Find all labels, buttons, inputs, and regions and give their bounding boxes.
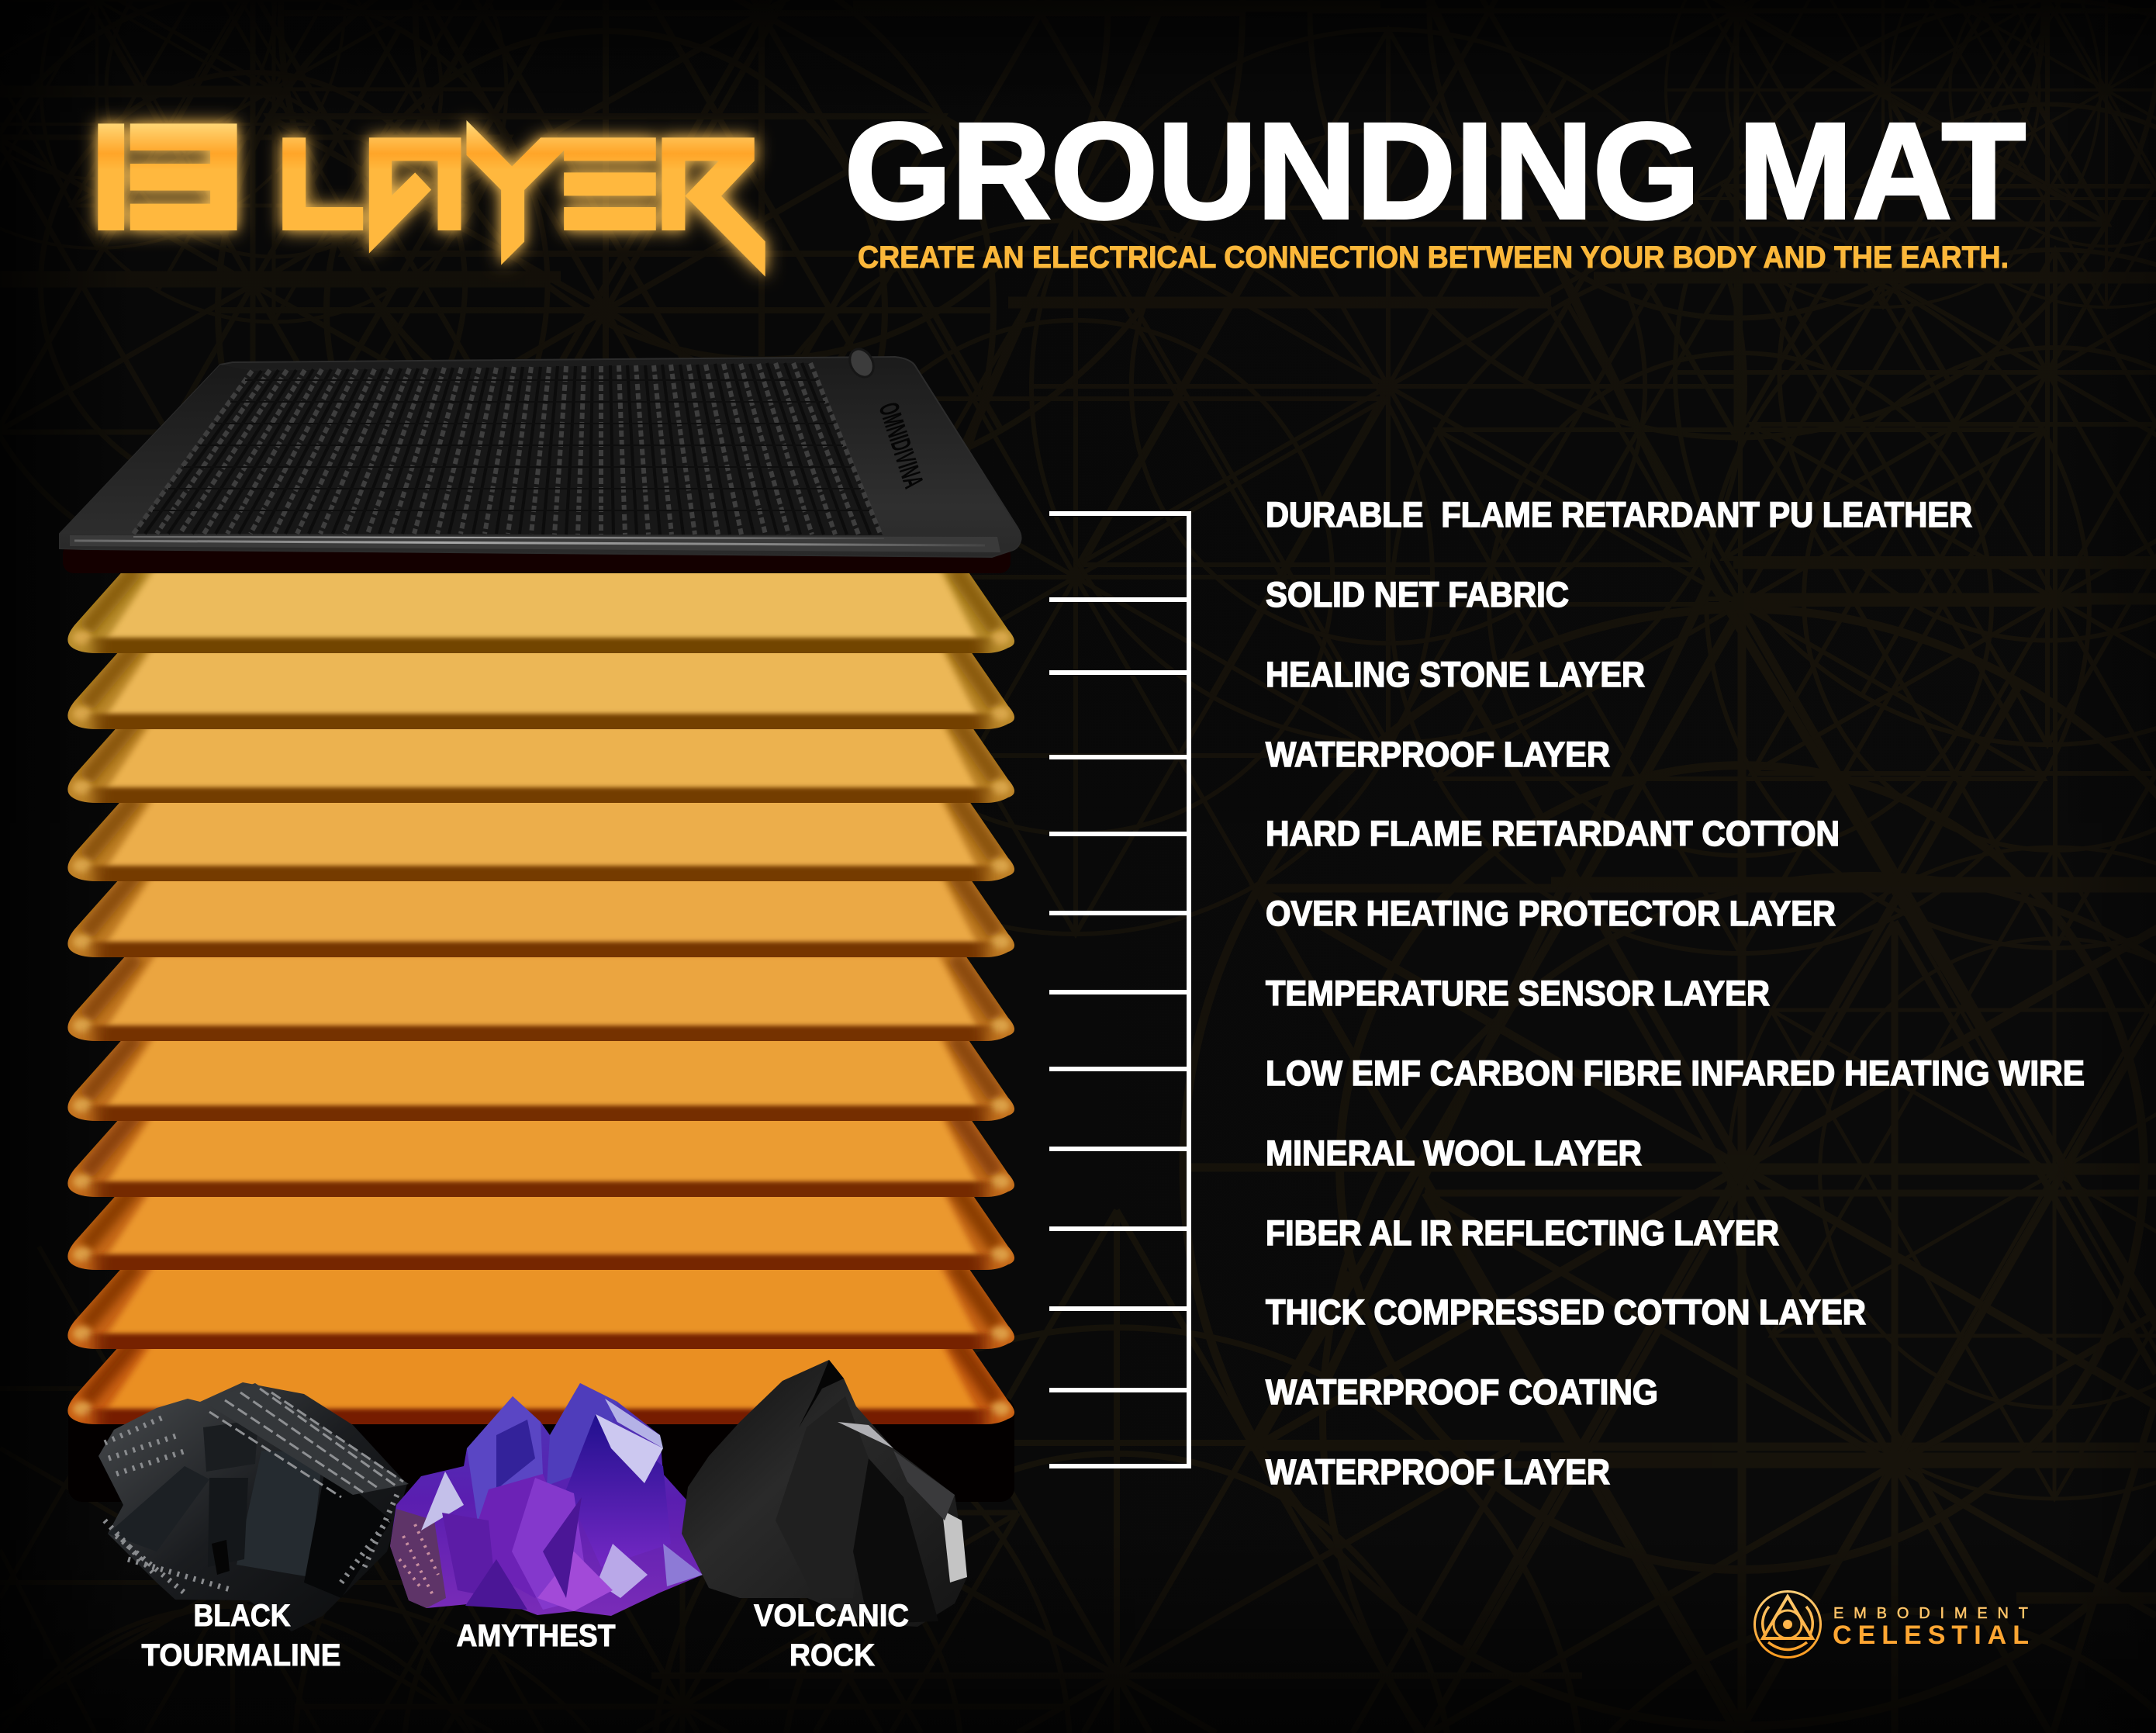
shadow under the layer stack [68,1396,1014,1502]
title: GROUNDING MAT: GROUNDING MAT [845,95,2026,247]
mat body [60,357,1021,557]
logo letters 13 LAYER [98,120,765,277]
label 8: LOW EMF CARBON FIBRE INFARED HEATING WIRE [1266,1053,2085,1093]
dark red band under the mat [63,543,1011,573]
layer 11 [67,1337,1014,1434]
mat lower edge highlight [70,535,1000,552]
stone labels [141,1599,909,1672]
label 11: THICK COMPRESSED COTTON LAYER [1266,1292,1866,1332]
stone: amethyst [390,1383,703,1616]
label: volcanic rock [754,1599,909,1672]
mat snap button [845,345,878,381]
label: amethyst: AMYTHEST [456,1619,616,1653]
label 13: WATERPROOF LAYER [1266,1452,1610,1492]
layer stack: 11 gold layers [67,566,1014,1434]
logo title: 13 LAYER [98,120,765,277]
mat left strip [60,365,252,534]
layer 8 [67,1110,1014,1206]
label 1: DURABLE FLAME RETARDANT PU LEATHER [1266,495,1972,534]
wordmark line 2: CELESTIAL [1833,1621,2029,1650]
layer 2 [67,642,1014,739]
grounding mat product photo [60,345,1021,557]
stone: volcanic rock [682,1360,967,1627]
bracket connector lines [1049,514,1189,1466]
layer 7 [67,1034,1014,1130]
mat brand text: OMNIDIVINA [872,399,930,492]
label: volcanic rock: VOLCANIC [754,1599,909,1633]
mat woven panel [133,363,883,535]
layer 6 [67,954,1014,1050]
subtitle: CREATE AN ELECTRICAL CONNECTION BETWEEN YOUR BODY AND THE EARTH. [858,240,2009,275]
logo glow [98,120,765,277]
label: volcanic rock: ROCK [789,1638,875,1672]
icon: eye in triangle [1754,1592,1821,1657]
label 2: SOLID NET FABRIC [1266,575,1569,614]
label: black tourmaline [141,1599,341,1672]
label 12: WATERPROOF COATING [1266,1372,1658,1412]
label 3: HEALING STONE LAYER [1266,655,1645,694]
label 7: TEMPERATURE SENSOR LAYER [1266,974,1770,1013]
layer 1 [67,566,1014,662]
layer 3 [67,716,1014,812]
label 9: MINERAL WOOL LAYER [1266,1133,1642,1173]
layer labels list [1266,495,2085,1492]
label 5: HARD FLAME RETARDANT COTTON [1266,814,1840,853]
brand logo: Embodiment Celestial [1754,1592,2029,1657]
label: black tourmaline: TOURMALINE [141,1638,341,1672]
label: black tourmaline: BLACK [194,1599,291,1633]
label 4: WATERPROOF LAYER [1266,735,1610,774]
label 6: OVER HEATING PROTECTOR LAYER [1266,894,1836,933]
layer 5 [67,870,1014,967]
stone: black tourmaline [98,1382,409,1631]
layer 10 [67,1262,1014,1358]
wordmark line 1: EMBODIMENT [1833,1605,2028,1622]
logo glow inner [98,120,765,277]
layer 4 [67,794,1014,891]
layer 9 [67,1183,1014,1279]
label 10: FIBER AL IR REFLECTING LAYER [1266,1213,1779,1253]
